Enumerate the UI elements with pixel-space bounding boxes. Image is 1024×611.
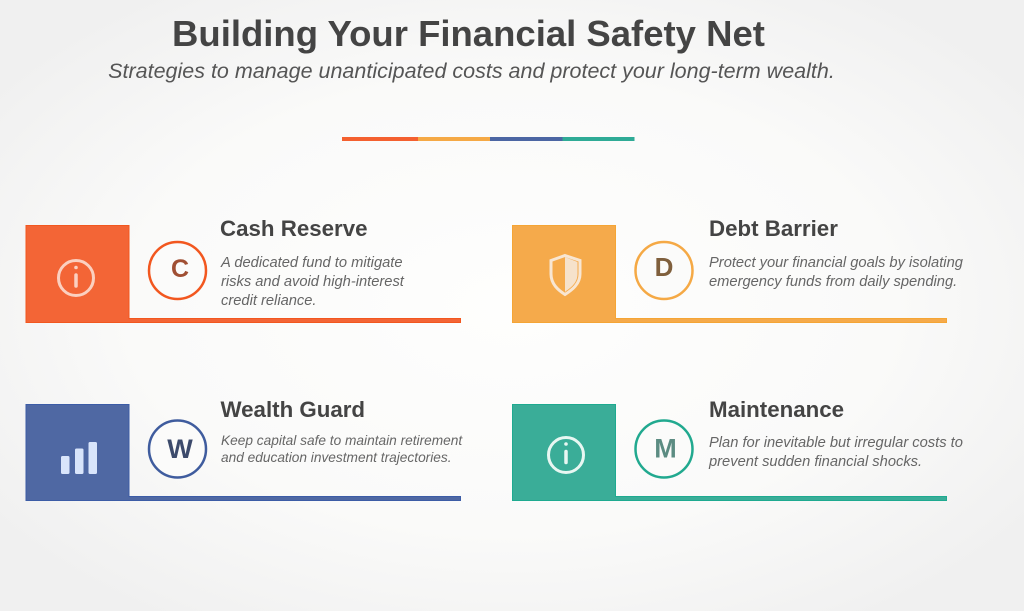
description: prevent sudden financial shocks. <box>708 454 922 470</box>
icon: info <box>58 260 94 296</box>
icon: info <box>548 438 584 472</box>
colour divider <box>342 137 634 141</box>
icon: bar chart <box>61 442 97 474</box>
subtitle: Strategies to manage unanticipated costs and protect your long-term wealth. <box>108 59 835 83</box>
heading: Debt Barrier <box>709 216 838 241</box>
description: Plan for inevitable but irregular costs to <box>709 435 963 451</box>
letter badge: D <box>655 252 673 282</box>
panel: debt barrier <box>512 216 964 322</box>
panel: wealth guard <box>26 397 463 500</box>
description: credit reliance. <box>221 293 317 309</box>
description: A dedicated fund to mitigate <box>220 255 403 271</box>
letter badge <box>149 242 206 299</box>
colour block and underline <box>512 404 946 500</box>
letter badge <box>636 420 692 478</box>
colour block and underline <box>512 226 946 322</box>
letter badge: M <box>654 434 677 464</box>
letter badge <box>636 242 692 299</box>
description: and education investment trajectories. <box>221 450 452 465</box>
letter badge: C <box>171 255 189 283</box>
letter badge <box>149 420 206 478</box>
description: Protect your financial goals by isolating <box>709 255 964 271</box>
letter badge: W <box>167 434 193 464</box>
description: Keep capital safe to maintain retirement <box>221 433 463 448</box>
heading: Wealth Guard <box>220 397 365 422</box>
description: risks and avoid high-interest <box>221 274 405 290</box>
icon: shield <box>551 256 580 294</box>
panel: cash reserve <box>26 216 460 322</box>
panel: maintenance <box>512 397 963 500</box>
heading: Cash Reserve <box>220 216 368 241</box>
description: emergency funds from daily spending. <box>709 274 957 290</box>
heading: Maintenance <box>709 397 844 422</box>
colour block and underline <box>26 404 460 500</box>
colour block and underline <box>26 226 460 322</box>
title: Building Your Financial Safety Net <box>172 13 765 54</box>
